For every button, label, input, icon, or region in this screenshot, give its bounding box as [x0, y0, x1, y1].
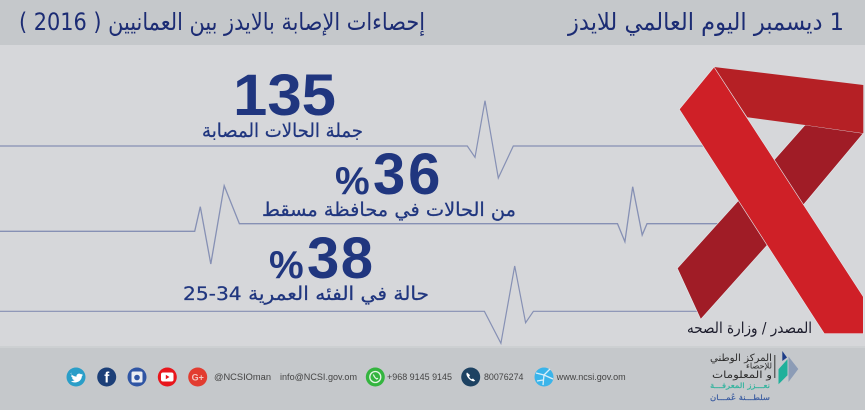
heartbeat line 2	[0, 186, 720, 264]
label: Muscat share: من الحالات في محافظة مسقط	[262, 199, 516, 221]
logo: NCSI	[710, 351, 798, 402]
number 36%: 36	[373, 142, 441, 207]
logo name: و المعلومات	[712, 370, 772, 381]
label: age group: حالة في الفئه العمرية 34-25	[183, 283, 429, 305]
heading: statistics title: إحصاءات الإصابة بالايدز بين العمانيين ( 2016 )	[19, 8, 425, 37]
icon: globe	[534, 368, 554, 386]
number 38%: %	[269, 244, 304, 287]
twitter handle: @NCSIOman	[214, 372, 271, 382]
heading: world AIDS day: 1 ديسمبر اليوم العالمي للايدز	[567, 8, 844, 36]
icon: google plus: G+	[192, 372, 204, 382]
heartbeat line 3	[0, 266, 700, 343]
email address: info@NCSI.gov.om	[280, 372, 357, 382]
logo name	[710, 353, 772, 381]
number 36%: %	[335, 160, 370, 203]
website: www.ncsi.gov.om	[556, 372, 626, 382]
stat: Muscat share	[262, 142, 516, 221]
panel: footer	[0, 346, 865, 410]
logo mark	[774, 351, 798, 384]
icon: youtube	[158, 368, 177, 386]
toll-free number: 80076274	[484, 372, 524, 382]
icon: whatsapp	[366, 368, 385, 386]
icon: facebook: f	[104, 370, 110, 386]
icon: red ribbon	[677, 67, 863, 334]
icon: twitter	[66, 368, 86, 386]
heartbeat line 1	[0, 101, 705, 178]
number 38%: 38	[307, 226, 375, 291]
stat: age group share	[183, 226, 429, 305]
icon: phone	[461, 368, 480, 386]
label: total cases: جملة الحالات المصابة	[202, 120, 363, 142]
icon: facebook	[97, 368, 116, 386]
stat: total cases	[202, 63, 363, 142]
panel: header	[0, 0, 865, 45]
logo country: سلطـــنة عُمـــان	[710, 393, 770, 402]
logo name: للإحصاء	[746, 362, 772, 372]
logo name: المركز الوطني	[710, 353, 772, 364]
number 135: 135	[233, 63, 336, 128]
logo slogan: نعـــزز المعرفـــة	[710, 381, 770, 390]
source note: المصدر / وزارة الصحه	[687, 319, 812, 337]
icon: instagram	[128, 368, 146, 386]
whatsapp number: +968 9145 9145	[387, 372, 452, 382]
icon: google plus	[188, 368, 207, 386]
